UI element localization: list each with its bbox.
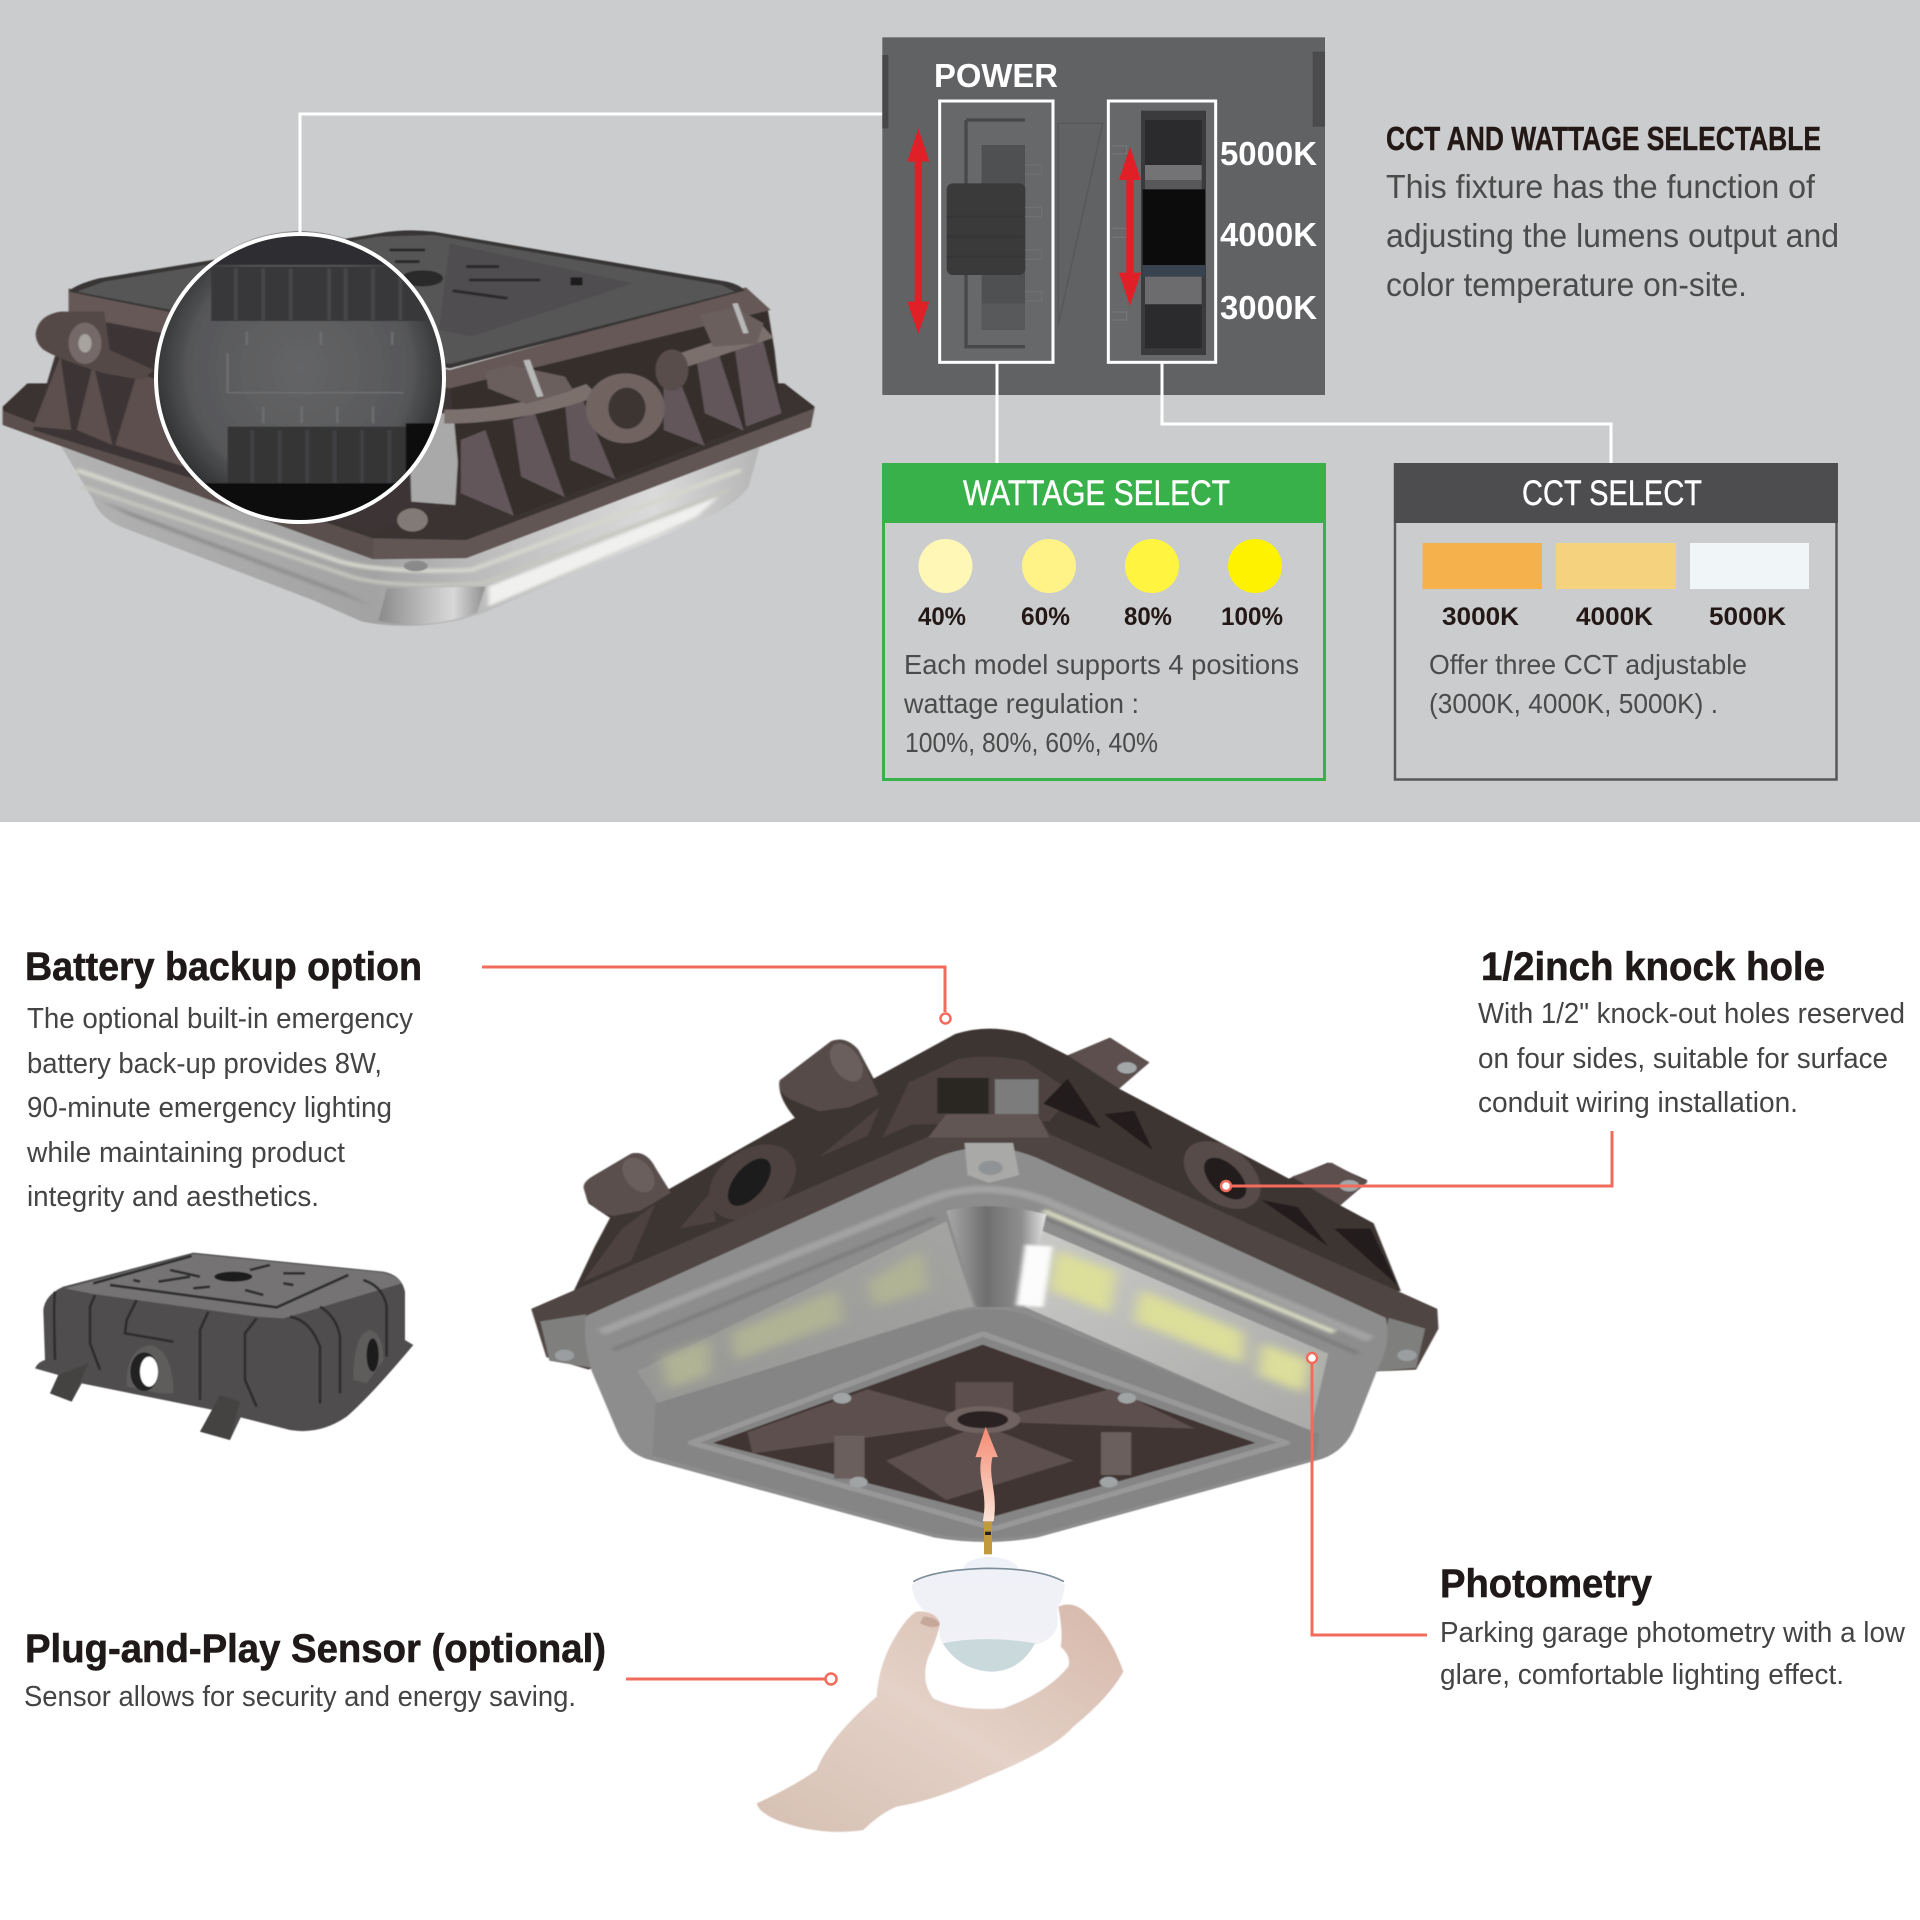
- description line 1: Each model supports 4 positions: [904, 649, 1299, 680]
- barrels: [584, 1153, 671, 1216]
- text block: knock hole: [1478, 945, 1905, 1119]
- base flange: [3, 383, 815, 558]
- label 3000K: 3000K: [1442, 603, 1519, 631]
- body line 1: With 1/2" knock-out holes reserved: [1478, 998, 1905, 1030]
- body line 2: adjusting the lumens output and: [1386, 217, 1839, 254]
- connector: wattage switch to wattage box: [996, 362, 998, 464]
- swatch 4000K: [1556, 543, 1676, 589]
- label: 5000K: 5000K: [1220, 135, 1317, 172]
- lower band: [652, 1309, 1319, 1538]
- corner cone: [946, 1206, 1046, 1307]
- body line 2: glare, comfortable lighting effect.: [1440, 1659, 1844, 1691]
- header title: CCT SELECT: [1522, 474, 1702, 513]
- dot 80%: [1125, 539, 1179, 593]
- heading: Plug-and-Play Sensor (optional): [25, 1627, 606, 1671]
- body line 3: color temperature on-site.: [1386, 266, 1747, 303]
- dot 60%: [1022, 539, 1076, 593]
- magnifier ring: [156, 234, 444, 522]
- swatch 5000K: [1690, 543, 1809, 589]
- lens body: [585, 1147, 1387, 1542]
- body line 4: while maintaining product: [26, 1137, 345, 1169]
- description line 2: (3000K, 4000K, 5000K) .: [1429, 688, 1718, 719]
- brackets: [485, 365, 573, 404]
- arrow: sensor plugs into fixture: [975, 1427, 998, 1521]
- dot 100%: [1228, 539, 1282, 593]
- label 60%: 60%: [1021, 603, 1070, 631]
- arrow: cct up/down: [1119, 147, 1141, 306]
- header bar: [1394, 463, 1838, 523]
- description line 3: 100%, 80%, 60%, 40%: [905, 727, 1158, 758]
- left fins: [583, 1080, 934, 1282]
- heading: Photometry: [1440, 1562, 1653, 1606]
- dot 40%: [918, 539, 972, 593]
- sensor body: [912, 1557, 1065, 1645]
- fins left: [33, 357, 184, 467]
- label 4000K: 4000K: [1576, 603, 1653, 631]
- heading: 1/2inch knock hole: [1481, 945, 1825, 989]
- LED patches: [662, 1250, 1310, 1393]
- left barrel: [36, 312, 154, 380]
- body line 2: battery back-up provides 8W,: [27, 1048, 382, 1080]
- header title: WATTAGE SELECT: [963, 474, 1230, 513]
- panel: wattage select: [882, 463, 1326, 780]
- body line 1: This fixture has the function of: [1386, 168, 1816, 205]
- arrow: wattage up/down: [907, 128, 929, 334]
- center hole: [945, 1406, 1020, 1433]
- flange: [531, 1114, 1438, 1371]
- label 100%: 100%: [1221, 603, 1283, 631]
- cct switch: [1108, 101, 1216, 362]
- clips at corners: [540, 1314, 1425, 1371]
- text block: photometry: [1440, 1562, 1906, 1691]
- connector: cct switch to cct box: [1162, 362, 1611, 464]
- hand: [757, 1604, 1123, 1832]
- panel: switch closeup: [882, 37, 1325, 395]
- fixture walls: [33, 313, 455, 533]
- callout line: photometry: [1307, 1353, 1427, 1635]
- right fins: [1043, 1079, 1398, 1286]
- body line 3: conduit wiring installation.: [1478, 1087, 1798, 1119]
- gold plug: [984, 1522, 992, 1554]
- swatch 3000K: [1422, 543, 1542, 589]
- sensor held in hand: [757, 1522, 1123, 1832]
- lens grooves: [601, 1189, 1371, 1354]
- label 5000K: 5000K: [1709, 603, 1786, 631]
- body line 2: on four sides, suitable for surface: [1478, 1043, 1888, 1075]
- connector: magnifier to switch panel: [300, 114, 884, 232]
- label: 4000K: 4000K: [1220, 216, 1317, 253]
- header bar: [882, 463, 1326, 523]
- lens top clip: [965, 1143, 1019, 1183]
- sensor lens dome: [943, 1639, 1035, 1672]
- illustration: fixture back with magnifier: [3, 230, 815, 626]
- text block: cct and wattage selectable: [1386, 120, 1839, 303]
- upper body: [574, 1029, 1401, 1291]
- body line 5: integrity and aesthetics.: [27, 1181, 319, 1213]
- rim and lid: [69, 287, 771, 388]
- text block: plug-and-play sensor: [24, 1627, 606, 1713]
- lens right face: [1025, 1229, 1328, 1432]
- heading: Battery backup option: [25, 945, 422, 989]
- panel: top grey background: [0, 0, 1920, 822]
- lens left face: [637, 1221, 974, 1404]
- body line 1: The optional built-in emergency: [27, 1003, 413, 1035]
- callout line: sensor: [626, 1674, 836, 1684]
- text block: battery backup option: [25, 945, 422, 1213]
- illustration: battery backup housing: [35, 1253, 413, 1440]
- magnified switch inside circle: [154, 230, 450, 527]
- lens of fixture: [60, 445, 760, 626]
- label 80%: 80%: [1124, 603, 1172, 631]
- body line 3: 90-minute emergency lighting: [27, 1092, 392, 1124]
- main illustration: fixture underside: [531, 1029, 1438, 1542]
- body line 1: Parking garage photometry with a low: [1440, 1617, 1906, 1649]
- description line 2: wattage regulation :: [903, 688, 1139, 719]
- bottom opening: [713, 1345, 1255, 1516]
- description line 1: Offer three CCT adjustable: [1429, 649, 1747, 680]
- label 40%: 40%: [918, 603, 966, 631]
- heading: CCT AND WATTAGE SELECTABLE: [1386, 120, 1821, 157]
- panel: cct select: [1394, 463, 1838, 780]
- body: Sensor allows for security and energy saving.: [24, 1681, 576, 1713]
- callout line: knock hole: [1221, 1131, 1612, 1191]
- wattage switch: [940, 101, 1053, 362]
- callout line: battery backup: [482, 967, 950, 1024]
- label: 3000K: 3000K: [1220, 289, 1317, 326]
- bracket plates: [1068, 1037, 1368, 1205]
- highlight: [1016, 1245, 1052, 1307]
- fins right: [461, 338, 782, 516]
- label: power: POWER: [934, 57, 1058, 94]
- band and ring: [444, 332, 768, 417]
- bottom bolt: [397, 508, 428, 532]
